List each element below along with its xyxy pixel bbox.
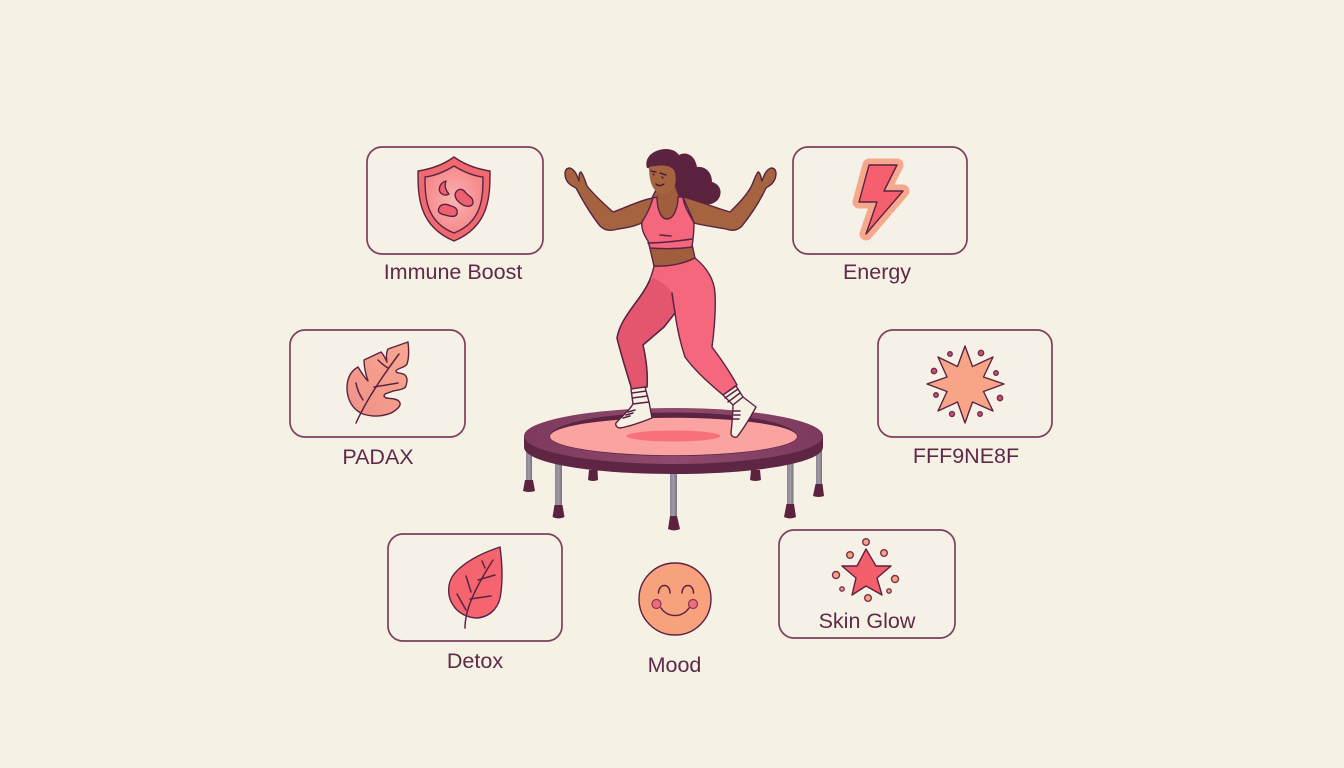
face details [651, 171, 666, 186]
trampoline mat [550, 412, 798, 456]
icon: star with sparkles [832, 539, 898, 601]
panel: fff9ne8f [878, 330, 1052, 468]
leggings [617, 258, 737, 395]
leg outline [617, 280, 675, 390]
trampoline [523, 408, 824, 530]
head [649, 166, 676, 194]
trampoline frame [524, 436, 823, 474]
icon: smiley face [639, 563, 711, 635]
icon: sparkle burst [927, 346, 1004, 423]
neck and midriff [648, 185, 695, 266]
icon: monstera leaf [347, 342, 409, 423]
label: immune boost: Immune Boost [384, 260, 522, 284]
label: energy: Energy [843, 260, 911, 284]
panel: detox [388, 534, 562, 673]
left sock and shoe [616, 387, 652, 428]
icon: leaf [449, 547, 502, 628]
right sock and shoe [723, 386, 756, 437]
icon: shield with germs [418, 157, 490, 241]
panel: energy [793, 147, 967, 284]
label: fff9ne8f: FFF9NE8F [913, 444, 1019, 468]
label: detox: Detox [447, 649, 503, 673]
hair [646, 149, 721, 204]
panel: immune boost [367, 147, 543, 284]
label: skin glow: Skin Glow [819, 609, 916, 633]
panel: padax [290, 330, 465, 469]
panel: mood [639, 563, 711, 677]
right arm [683, 168, 776, 230]
figure: woman jumping [565, 149, 776, 437]
label: padax: PADAX [342, 445, 414, 469]
sports top [642, 197, 694, 249]
left arm [565, 168, 653, 230]
shaded back leg [617, 278, 674, 390]
trampoline legs [523, 448, 824, 530]
panel: skin glow [779, 530, 955, 638]
label: mood: Mood [648, 653, 701, 677]
icon: lightning bolt [859, 165, 903, 234]
